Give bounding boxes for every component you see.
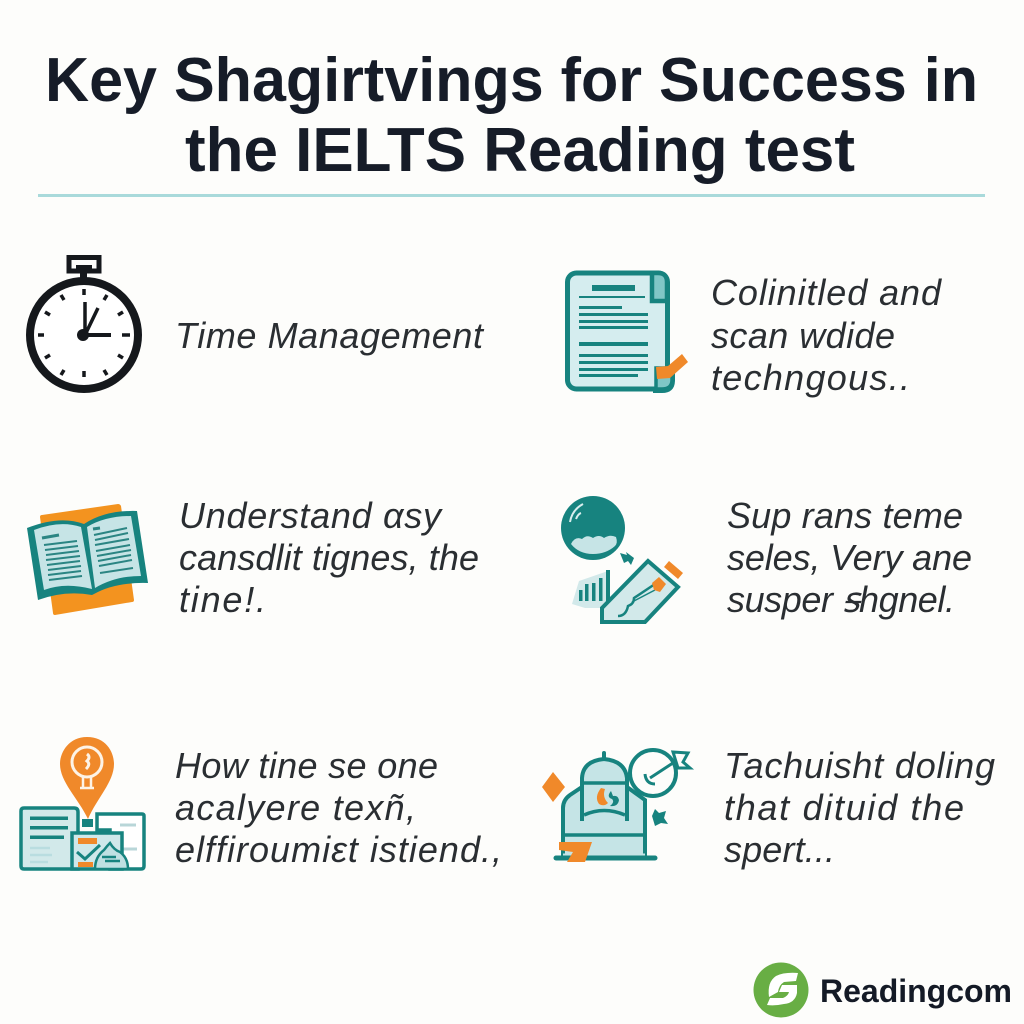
icon: open book — [27, 504, 148, 615]
title: the IELTS Reading test — [185, 116, 855, 185]
icon: observatory dome with dial — [542, 750, 690, 862]
text: technique: spert... — [724, 829, 835, 870]
text: skim and scan: scan wdide — [711, 315, 895, 356]
text: analyse: How tine se one — [175, 745, 438, 786]
text: understand: tine!. — [179, 579, 266, 620]
text: analyse: acalyere texñ, — [175, 787, 416, 828]
text: skim and scan: Colinitled and — [711, 272, 942, 313]
text: supporting ideas: Sup rans teme — [727, 495, 963, 536]
text: time management: Time Management — [175, 315, 485, 356]
text: understand: Understand αsy — [179, 495, 443, 536]
title: Key Shagirtvings for Success in — [45, 46, 978, 115]
icon: globe, chart and pencil — [561, 496, 683, 622]
text: understand — [179, 495, 479, 620]
text: supporting ideas: seles, Very ane — [727, 537, 972, 578]
text: technique — [724, 745, 995, 870]
text: technique: Tachuisht doling — [724, 745, 995, 786]
text: supporting ideas: susper ꟊhgnel. — [727, 579, 955, 620]
icon: document with orange tag — [568, 273, 688, 391]
text: skim and scan: techngous.. — [711, 357, 910, 398]
title — [45, 46, 978, 185]
text: technique: that dituid the — [724, 787, 964, 828]
text: skim and scan — [711, 272, 942, 398]
icon: map pin and documents — [21, 737, 144, 869]
text: analyse — [175, 745, 502, 870]
text: supporting ideas — [727, 495, 972, 620]
logo: Readingcom — [754, 962, 1012, 1018]
logo: Readingcom: Readingcom — [820, 973, 1012, 1009]
text: analyse: elffiroumiɛt istiend., — [175, 829, 502, 870]
icon: stopwatch — [30, 258, 138, 389]
text: understand: cansdlit tignes, the — [179, 537, 479, 578]
